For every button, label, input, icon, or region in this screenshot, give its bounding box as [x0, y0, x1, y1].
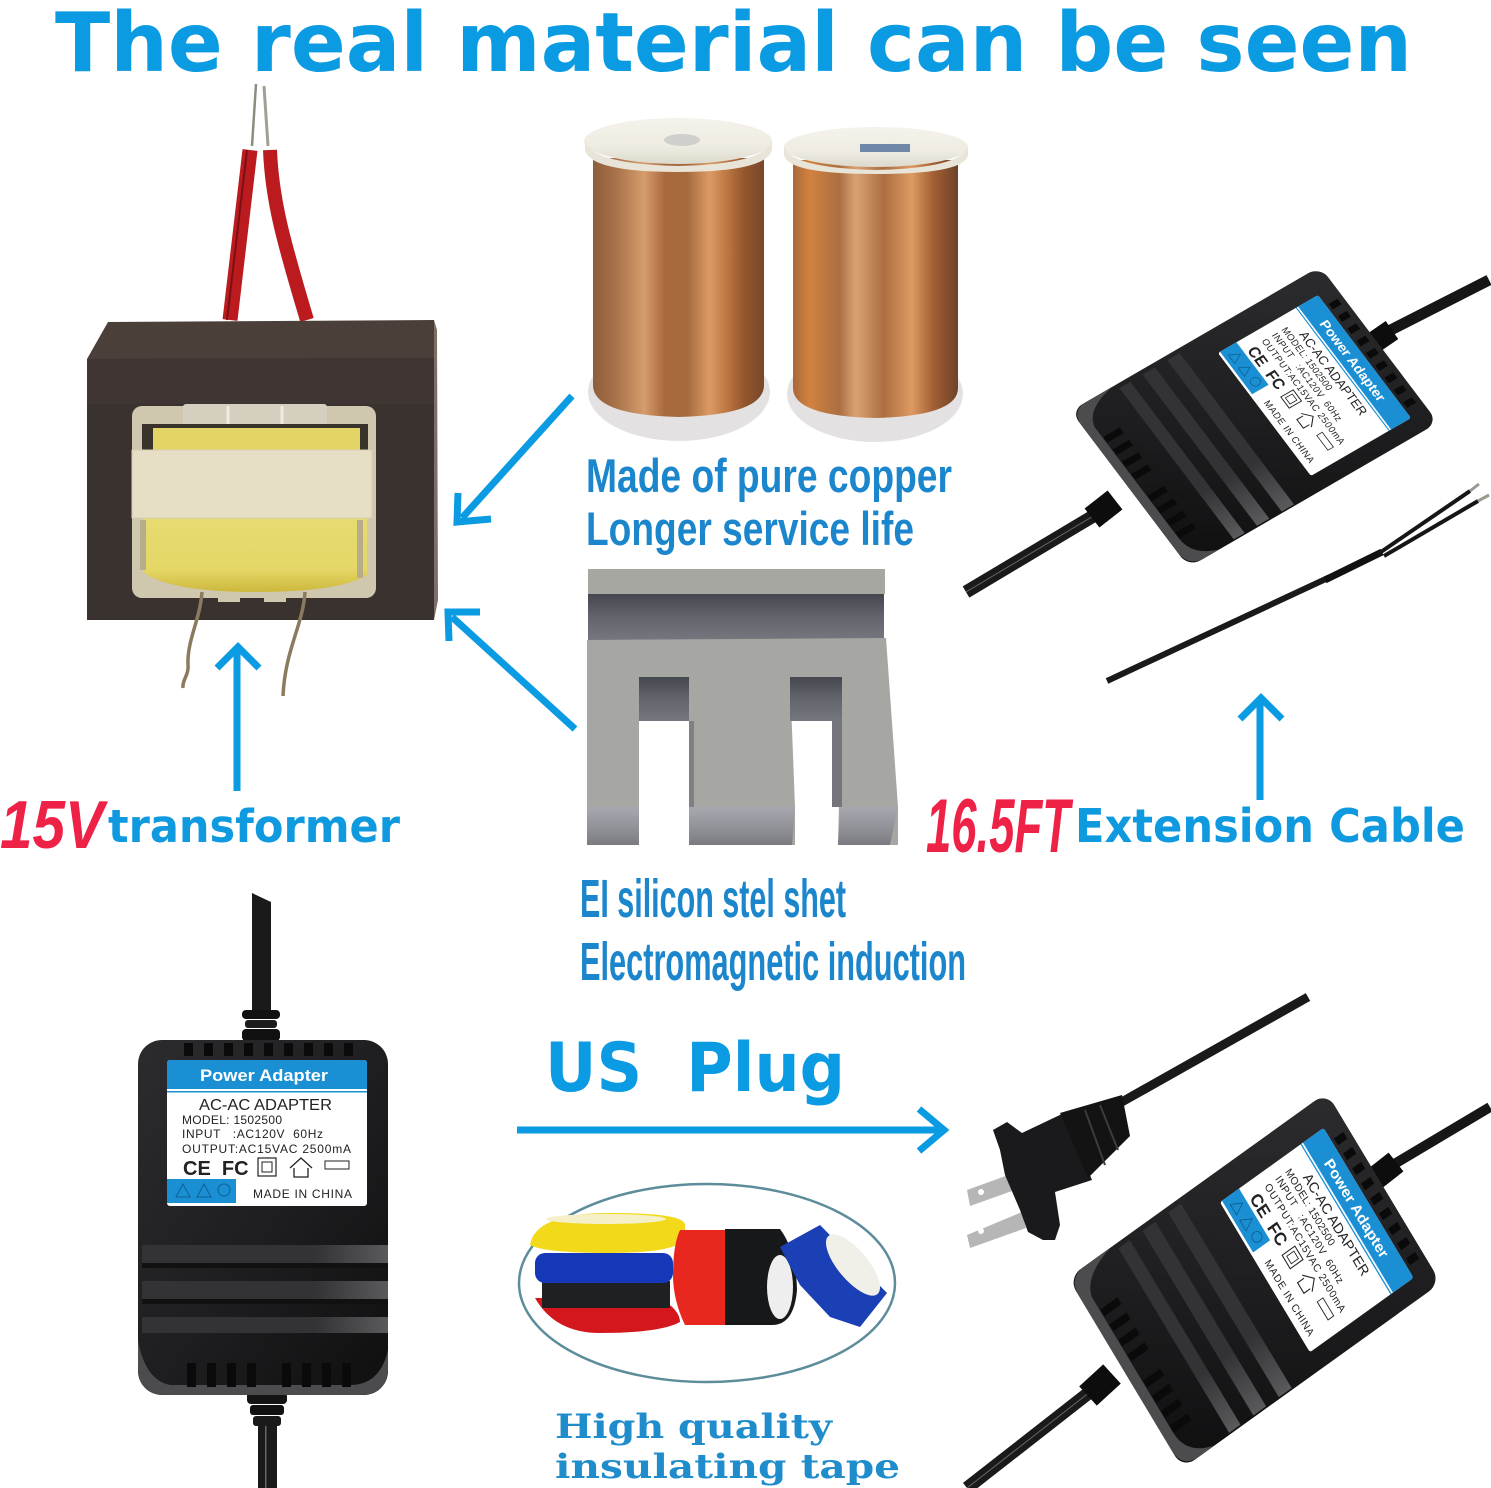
adapter body rotated: MODEL: 1502500	[1279, 326, 1335, 392]
adapter body rotated: Power Adapter	[1316, 318, 1389, 404]
caption: silicon steel	[580, 869, 966, 992]
transformer bobbin and winding	[132, 404, 372, 696]
adapter body	[138, 1040, 388, 1395]
adapter body rotated: CE FC	[1243, 344, 1288, 393]
adapter rating label: AC-AC ADAPTER	[199, 1097, 332, 1114]
label: 15V transformer: 15V	[0, 787, 109, 863]
photo: insulating tape rolls	[519, 1184, 895, 1382]
cables	[966, 280, 1489, 681]
label: 16.5FT Extension Cable	[926, 784, 1465, 869]
adapter body rotated: INPUT :AC120V 60Hz	[1270, 331, 1344, 423]
caption: silicon steel: EI silicon stel shet	[580, 869, 846, 929]
adapter rating label: INPUT :AC120V 60Hz	[182, 1127, 323, 1141]
arrow: cable label to adapter	[1240, 698, 1282, 800]
label: 16.5FT Extension Cable: Extension Cable	[1075, 799, 1465, 853]
transformer core	[87, 320, 438, 620]
power cord	[967, 997, 1490, 1488]
label: 15V transformer	[0, 787, 401, 863]
photo: EI silicon steel core	[587, 569, 898, 845]
icon: US plug	[967, 1095, 1130, 1248]
red lead wires	[227, 84, 307, 320]
adapter body rotated: Power Adapter	[1320, 1156, 1391, 1262]
label: 15V transformer: transformer	[108, 800, 401, 853]
copper spool right	[784, 127, 968, 442]
adapter rating label: OUTPUT:AC15VAC 2500mA	[182, 1142, 351, 1156]
caption: insulating tape: insulating tape	[555, 1447, 900, 1487]
adapter rating label	[167, 1060, 367, 1206]
adapter rating label: Power Adapter	[200, 1066, 328, 1085]
arrow: steel to transformer	[448, 612, 575, 729]
adapter body rotated: CE FC	[1246, 1189, 1292, 1250]
adapter body rotated: MADE IN CHINA	[1262, 399, 1317, 465]
caption: insulating tape: High quality	[555, 1407, 833, 1447]
adapter body rotated: OUTPUT:AC15VAC 2500mA	[1262, 1182, 1347, 1315]
photo: EI transformer	[87, 84, 438, 696]
caption: copper: Made of pure copper	[586, 449, 952, 502]
adapter rating label: MADE IN CHINA	[253, 1187, 352, 1201]
photo: adapter with US plug	[967, 997, 1490, 1488]
adapter body rotated: OUTPUT:AC15VAC 2500mA	[1259, 337, 1347, 447]
adapter body rotated: AC-AC ADAPTER	[1296, 329, 1370, 418]
tape rolls standing	[673, 1225, 889, 1327]
arrow: to US plug adapter	[517, 1109, 944, 1151]
label: US Plug: US Plug	[545, 1029, 845, 1108]
adapter rating label: MODEL: 1502500	[182, 1113, 282, 1127]
arrow: transformer label to transformer	[217, 647, 259, 791]
adapter body rotated: MADE IN CHINA	[1262, 1258, 1315, 1339]
arrow: copper to transformer	[457, 396, 572, 522]
adapter body rotated: INPUT :AC120V 60Hz	[1272, 1174, 1345, 1286]
photo: adapter with extension cable	[966, 266, 1489, 681]
photo: front view adapter	[138, 893, 388, 1488]
caption: silicon steel: Electromagnetic induction	[580, 932, 966, 992]
tape stack	[530, 1213, 685, 1333]
caption: copper	[586, 449, 952, 555]
photo: copper wire spools	[584, 118, 968, 442]
adapter body rotated	[1068, 1092, 1441, 1468]
adapter body rotated: AC-AC ADAPTER	[1300, 1170, 1373, 1279]
copper spool left	[584, 118, 772, 441]
label: 16.5FT Extension Cable: 16.5FT	[926, 784, 1073, 869]
adapter body rotated: MODEL: 1502500	[1282, 1167, 1336, 1249]
caption: copper: Longer service life	[586, 502, 914, 555]
adapter body rotated	[1071, 266, 1438, 567]
adapter rating label: CE FC	[183, 1158, 249, 1180]
caption: insulating tape	[555, 1407, 900, 1487]
cable and strain reliefs	[242, 893, 287, 1488]
